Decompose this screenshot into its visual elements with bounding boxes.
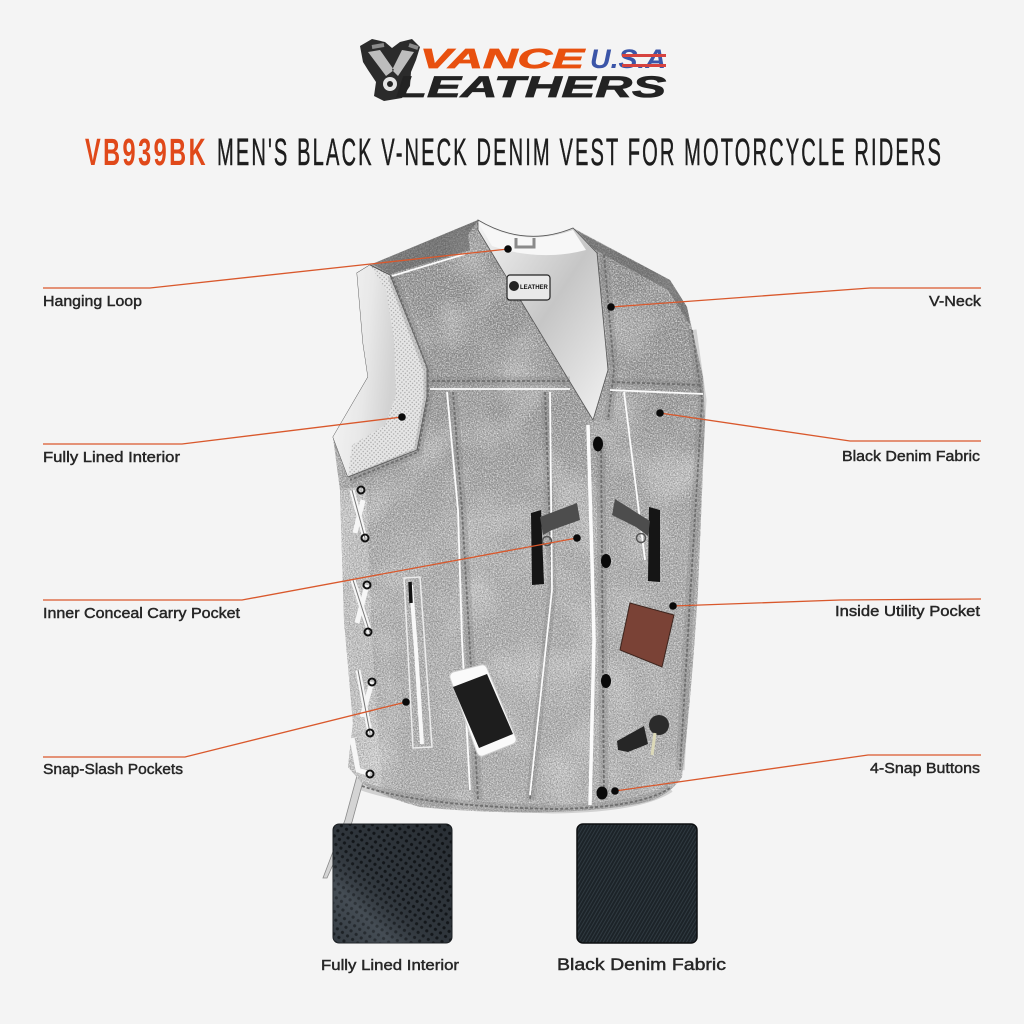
hanging loop	[516, 238, 534, 247]
swatch: fully lined interior: Fully Lined Interior	[321, 957, 459, 974]
seams	[350, 255, 702, 809]
icon: pistol left	[531, 503, 580, 585]
title: VB939BK	[85, 132, 208, 174]
logo: Vance Leathers USA	[360, 39, 666, 104]
swatch: black denim fabric: Black Denim Fabric	[557, 955, 727, 974]
vest illustration	[323, 220, 705, 878]
side lacing	[352, 486, 376, 778]
vest darker shoulder shading	[372, 220, 690, 325]
neck tag	[507, 275, 550, 300]
white highlight lines	[392, 254, 703, 805]
snap buttons	[593, 436, 611, 800]
icon: smartphone	[450, 665, 516, 756]
armhole lining	[333, 265, 427, 477]
swatch: black denim fabric	[557, 824, 727, 974]
icon: pistol right	[612, 499, 660, 582]
callout: Inside Utility Pocket	[669, 599, 981, 620]
callout: Inner Conceal Carry Pocket	[43, 534, 581, 622]
callout: Black Denim Fabric	[656, 409, 981, 465]
callout: Snap-Slash Pockets: Snap-Slash Pockets	[43, 761, 183, 778]
swatch: fully lined interior	[321, 824, 459, 974]
icon: car key	[617, 715, 669, 755]
callout: 4-Snap Buttons	[611, 755, 981, 795]
zip pocket	[404, 577, 432, 748]
callout: Inside Utility Pocket: Inside Utility Pocket	[835, 603, 981, 620]
icon: wallet	[620, 603, 674, 667]
callout: 4-Snap Buttons: 4-Snap Buttons	[870, 760, 980, 777]
callout: Hanging Loop	[43, 245, 512, 310]
callout: Fully Lined Interior: Fully Lined Interior	[43, 449, 180, 466]
neck lining	[478, 220, 608, 420]
brand wordmark: LEATHERS	[396, 71, 666, 104]
brand wordmark: VANCE	[420, 43, 586, 74]
callout: Snap-Slash Pockets	[43, 698, 410, 778]
brand wordmark	[396, 43, 666, 104]
brand wordmark: U.S.A	[590, 44, 666, 74]
callout: Inner Conceal Carry Pocket: Inner Conceal Carry Pocket	[43, 605, 241, 622]
callout: V-Neck: V-Neck	[929, 293, 982, 310]
callout: Hanging Loop: Hanging Loop	[43, 293, 142, 310]
neck tag: LEATHER	[520, 285, 549, 291]
vest lace strap	[323, 772, 364, 878]
callout: V-Neck	[607, 288, 982, 311]
callout: Black Denim Fabric: Black Denim Fabric	[842, 448, 981, 465]
icon: engine	[360, 39, 420, 101]
callout: Fully Lined Interior	[43, 413, 406, 466]
vest denim body	[333, 220, 705, 812]
